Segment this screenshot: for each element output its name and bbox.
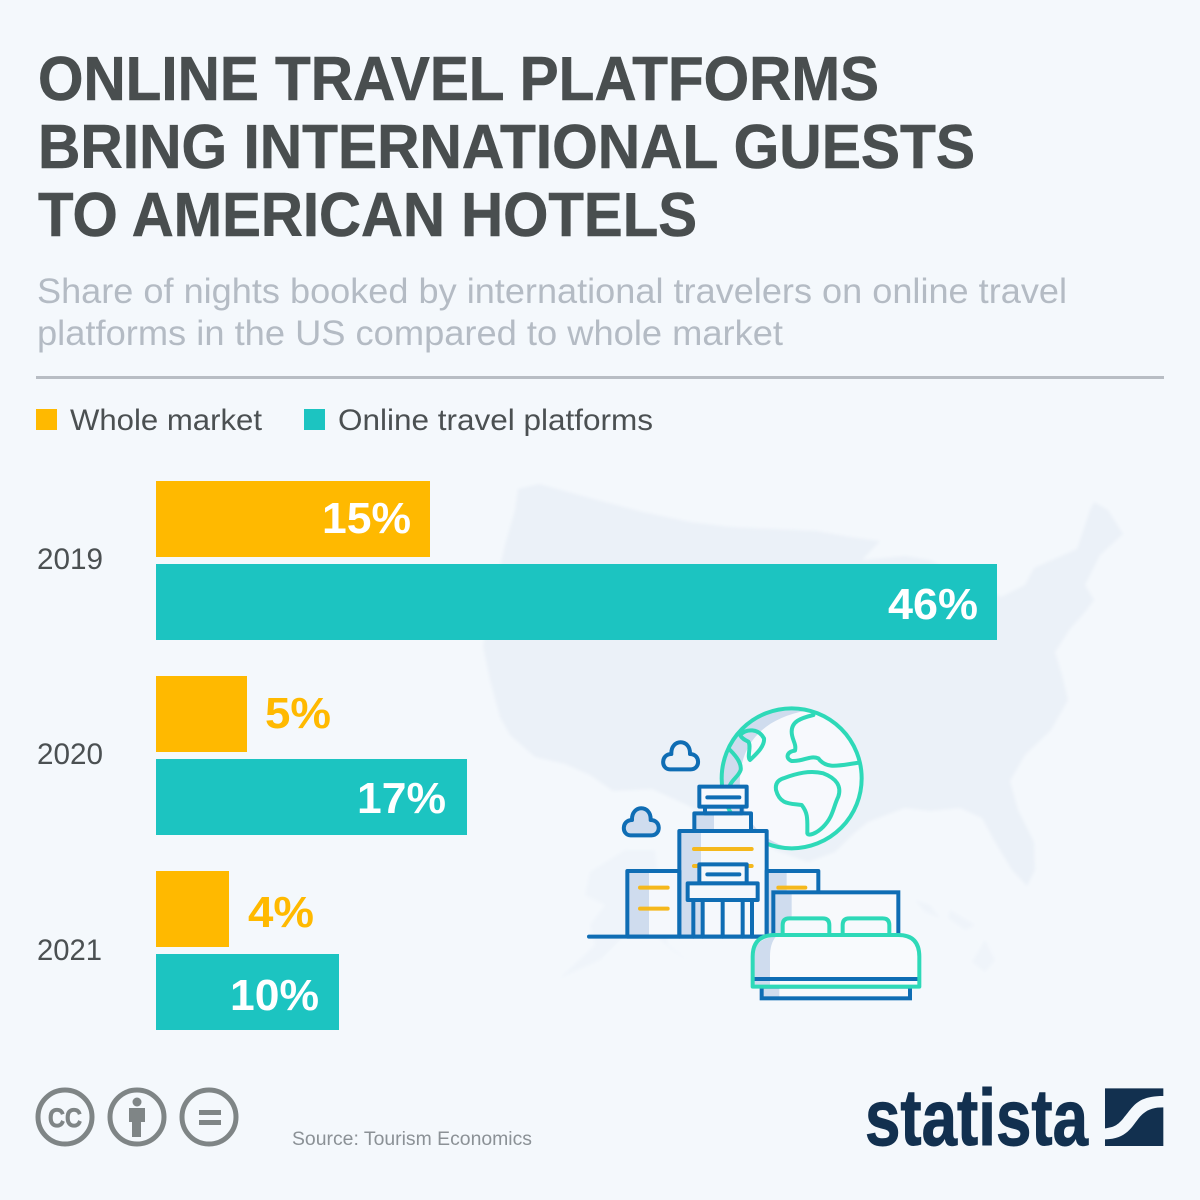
legend — [36, 404, 653, 437]
bar: 2020 online travel platforms — [156, 759, 467, 835]
license icons — [38, 1090, 236, 1144]
year label 2021: 2021 — [37, 934, 102, 967]
subtitle: platforms in the US compared to whole market — [37, 314, 783, 353]
bar: 2021 whole market — [156, 871, 229, 947]
bar chart — [37, 481, 997, 1030]
bar: 2020 whole market — [156, 676, 247, 752]
title: TO AMERICAN HOTELS — [38, 181, 697, 250]
icon: globe — [722, 708, 862, 848]
icon: bed — [753, 892, 919, 998]
value 4%: 4% — [248, 888, 314, 937]
value 17%: 17% — [357, 774, 446, 823]
title — [38, 45, 975, 250]
map: Hawaii — [915, 900, 995, 972]
logo mark — [1105, 1088, 1163, 1146]
subtitle — [37, 272, 1067, 353]
statista logo: statista — [865, 1073, 1088, 1162]
icon: cloud lower — [624, 808, 659, 835]
value 10%: 10% — [230, 971, 319, 1020]
map: Alaska — [560, 850, 690, 978]
subtitle: Share of nights booked by international travelers on online travel — [37, 272, 1067, 311]
icon: attribution — [110, 1090, 164, 1144]
legend: Whole market — [70, 404, 263, 437]
source note: Source: Tourism Economics — [292, 1129, 532, 1150]
legend: Online travel platforms — [338, 404, 653, 437]
background map of the United States — [483, 484, 1123, 978]
icon: creative commons: CC — [48, 1103, 82, 1133]
value 5%: 5% — [265, 689, 331, 738]
value 46%: 46% — [888, 580, 978, 629]
icon: share alike — [182, 1090, 236, 1144]
bar: 2019 whole market — [156, 481, 430, 557]
title: BRING INTERNATIONAL GUESTS — [38, 113, 975, 182]
icon: cloud upper — [663, 742, 698, 769]
icon: hotel buildings — [589, 787, 818, 937]
bar: 2021 online travel platforms — [156, 954, 339, 1030]
illustration: globe, hotel and bed — [589, 708, 919, 998]
year label 2020: 2020 — [37, 738, 103, 771]
year label 2019: 2019 — [37, 543, 103, 576]
value 15%: 15% — [322, 494, 411, 543]
title: ONLINE TRAVEL PLATFORMS — [38, 45, 879, 114]
icon: creative commons — [38, 1090, 92, 1144]
bar: 2019 online travel platforms — [156, 564, 997, 640]
